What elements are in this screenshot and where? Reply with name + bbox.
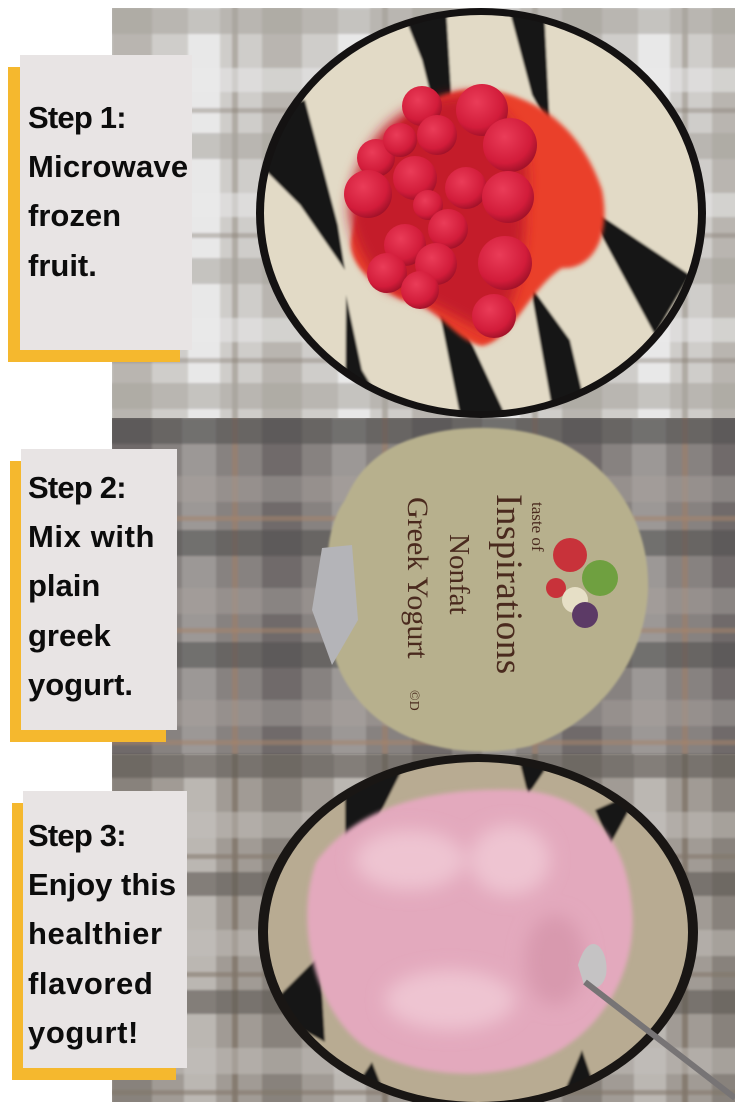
step 2 label card: yogurt.	[28, 667, 133, 702]
step 3 label card: yogurt!	[28, 1015, 139, 1050]
step 3 label card: Step 3:	[28, 818, 126, 853]
plate rim	[256, 8, 706, 418]
photo 2: nonfat greek yogurt lid	[102, 408, 735, 763]
peeled foil tab	[312, 545, 358, 665]
step 1 label card: fruit.	[28, 248, 97, 283]
step 1 label card	[20, 55, 192, 350]
brand name: Inspirations	[488, 494, 529, 675]
step 3 label card: flavored	[28, 966, 153, 1001]
step 1 label card: frozen	[28, 198, 121, 233]
photo 1: microwaved strawberries on plate	[102, 0, 735, 425]
spoon	[578, 944, 735, 1098]
step 3 label card: healthier	[28, 916, 163, 951]
brand name: Greek Yogurt	[401, 497, 434, 659]
step 1 accent bar	[8, 67, 180, 362]
pink yogurt	[307, 790, 633, 1074]
step 2 label card: Mix with	[28, 519, 155, 554]
red syrup	[351, 88, 604, 346]
bowl interior with stripes	[260, 755, 700, 1102]
brand name: taste of	[528, 502, 547, 552]
lid disc	[328, 428, 648, 752]
dark fruit mass	[349, 95, 528, 335]
step 3 label card	[23, 791, 187, 1068]
brand name: Nonfat	[443, 534, 475, 615]
brand name: ©D	[406, 690, 421, 711]
bowl rim	[258, 754, 698, 1102]
yogurt swirls	[355, 825, 585, 1030]
step 2 label card: plain	[28, 568, 100, 603]
step 2 label card	[21, 449, 177, 730]
step 2 accent bar	[10, 461, 166, 742]
fruit logo	[546, 538, 618, 628]
step 1 label card: Microwave	[28, 149, 188, 184]
step 3 label card: Enjoy this	[28, 867, 176, 902]
photo 3: mixed pink yogurt in bowl	[102, 744, 735, 1102]
step 2 label card: greek	[28, 618, 111, 653]
step 2 label card: Step 2:	[28, 470, 126, 505]
brand name	[401, 494, 547, 711]
step 3 accent bar	[12, 803, 176, 1080]
plate interior with stripes	[264, 15, 698, 410]
strawberries	[344, 84, 537, 338]
step 1 label card: Step 1:	[28, 100, 126, 135]
